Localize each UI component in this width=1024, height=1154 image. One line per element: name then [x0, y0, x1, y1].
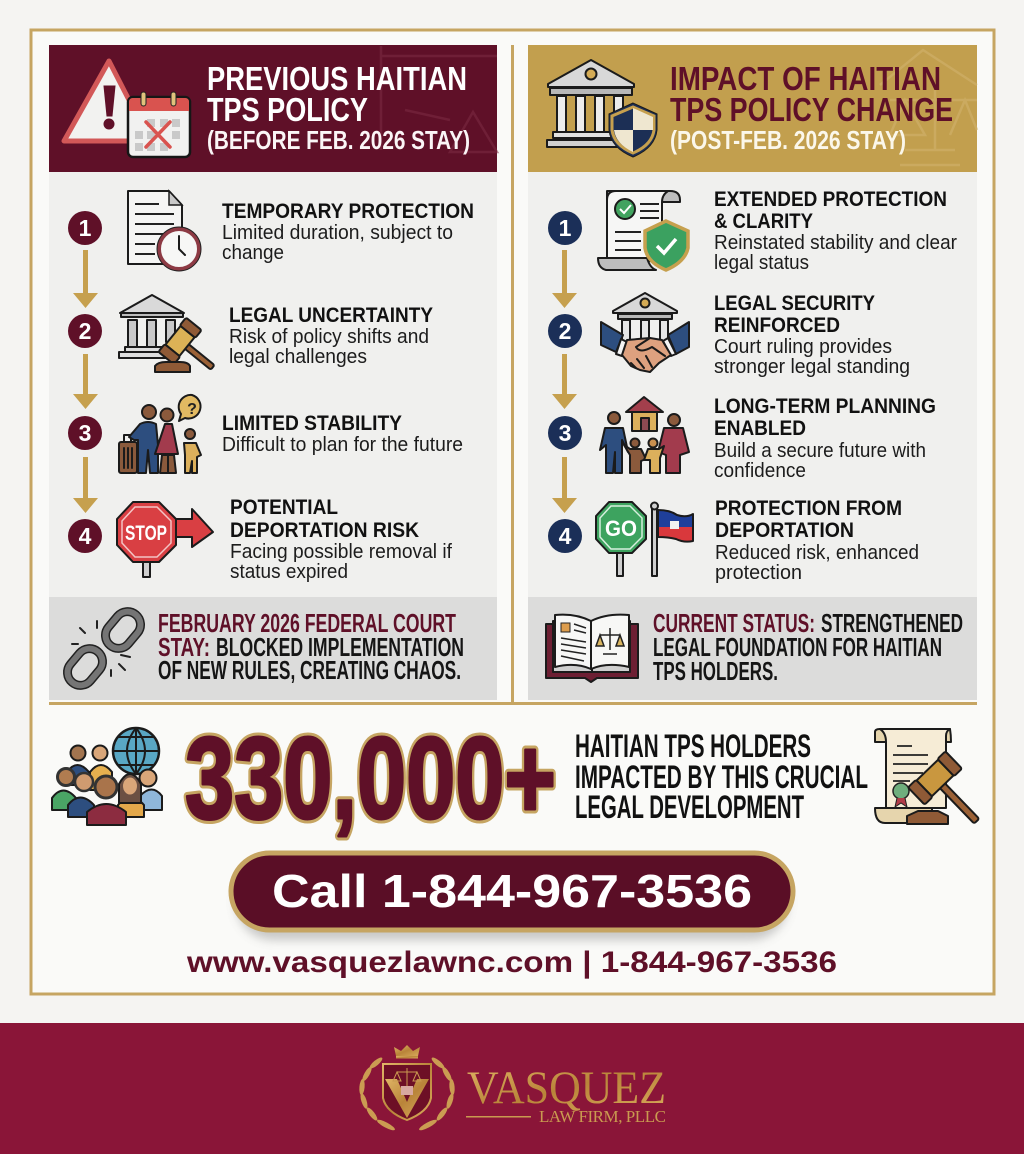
- panel: previous policy: [49, 45, 497, 700]
- statistic caption: IMPACTED BY THIS CRUCIAL: [575, 759, 868, 795]
- panel heading text: TPS POLICY: [207, 91, 368, 128]
- step 1 text: temporary protection: [222, 199, 474, 264]
- callout: federal court stay: [49, 597, 497, 700]
- panel heading text: PREVIOUS HAITIAN: [207, 60, 467, 97]
- step 2 text: legal security: stronger legal standing: [714, 356, 910, 378]
- panel heading text: (POST-FEB. 2026 STAY): [670, 125, 906, 155]
- step 4 text: protection from deportation: [715, 496, 919, 584]
- callout text: OF NEW RULES, CREATING CHAOS.: [158, 655, 461, 685]
- statistic caption: [575, 728, 868, 825]
- icon: document with clock: [128, 191, 201, 271]
- step 4 text: potential deportation risk: DEPORTATION RISK: [230, 518, 419, 542]
- step 1 text: temporary protection: TEMPORARY PROTECTION: [222, 199, 474, 223]
- callout text: TPS HOLDERS.: [653, 656, 778, 686]
- icon: family with suitcase: ?: [187, 401, 197, 418]
- icon: go sign with Haitian flag: GO: [605, 516, 637, 541]
- logo: vasquez law firm: [359, 1045, 666, 1132]
- panel heading text: TPS POLICY CHANGE: [670, 91, 953, 128]
- statistic caption: HAITIAN TPS HOLDERS: [575, 728, 811, 764]
- step 3 text: long-term planning: ENABLED: [714, 416, 806, 440]
- callout text: [653, 608, 963, 686]
- icon: broken chain: [62, 606, 146, 691]
- callout text: [158, 608, 464, 685]
- divider: horizontal gold: [49, 702, 977, 705]
- icon: warning triangle and calendar: [64, 61, 190, 157]
- step flow numbers and arrows: right: [548, 211, 582, 553]
- step 4 text: protection from deportation: protection: [715, 562, 802, 584]
- icon: stop sign with arrow: STOP: [125, 522, 167, 545]
- step 1 text: extended protection: EXTENDED PROTECTION: [714, 187, 947, 211]
- step 1 text: extended protection: & CLARITY: [714, 209, 813, 233]
- website and phone: www.vasquezlawnc.com | 1-844-967-3536: [186, 946, 837, 979]
- icon: stop sign with arrow: [117, 502, 213, 577]
- panel heading text: [207, 60, 470, 155]
- icon: group of people with globe: [52, 728, 162, 825]
- step 3 text: limited stability: Difficult to plan for the future: [222, 434, 463, 456]
- callout text: STAY:: [158, 632, 210, 662]
- step 2 text: legal uncertainty: legal challenges: [229, 346, 367, 368]
- big number: 330,000+: 330,000+: [185, 713, 556, 843]
- icon: family with suitcase: [119, 395, 201, 473]
- step 3 text: long-term planning: Build a secure future with: [714, 440, 926, 462]
- statistic band: [52, 713, 995, 843]
- step 2 text: legal security: REINFORCED: [714, 313, 840, 337]
- step flow numbers and arrows: left: 4: [79, 523, 92, 549]
- step 3 text: limited stability: [222, 411, 463, 456]
- step 4 text: protection from deportation: Reduced risk, enhanced: [715, 542, 919, 564]
- panel heading text: IMPACT OF HAITIAN: [670, 60, 941, 97]
- step flow numbers and arrows: right: 4: [559, 523, 572, 549]
- callout text: BLOCKED IMPLEMENTATION: [216, 632, 464, 662]
- step flow numbers and arrows: left: 2: [79, 318, 91, 344]
- step 1 text: temporary protection: Limited duration, subject to: [222, 222, 453, 244]
- step 2 text: legal uncertainty: LEGAL UNCERTAINTY: [229, 303, 433, 327]
- icon: go sign with Haitian flag: [596, 502, 693, 576]
- step 1 text: extended protection: Reinstated stability and clear: [714, 232, 957, 254]
- step flow numbers and arrows: left: [68, 211, 102, 553]
- step 4 text: potential deportation risk: Facing possible removal if: [230, 541, 452, 563]
- step 3 text: long-term planning: LONG-TERM PLANNING: [714, 394, 936, 418]
- panel header: previous policy: [49, 45, 497, 172]
- icon: scroll document with shield: [598, 191, 688, 270]
- icon: courthouse with gavel: [119, 295, 226, 385]
- main gold frame: [31, 30, 994, 994]
- panel header: impact: [528, 45, 977, 172]
- big number: 330,000+: 330,000+: [185, 713, 556, 843]
- step 2 text: legal security: [714, 291, 910, 378]
- step 1 text: extended protection: legal status: [714, 252, 809, 274]
- step 2 text: legal security: Court ruling provides: [714, 336, 892, 358]
- callout text: CURRENT STATUS:: [653, 608, 815, 638]
- step 2 text: legal uncertainty: Risk of policy shifts and: [229, 326, 429, 348]
- step 1 text: extended protection: [714, 187, 957, 274]
- panel: impact of policy change: [528, 45, 977, 700]
- step flow numbers and arrows: right: 3: [559, 420, 571, 446]
- icon: scroll with gavel: [875, 729, 995, 839]
- icon: open law book: [546, 615, 638, 682]
- step flow numbers and arrows: right: 2: [559, 318, 571, 344]
- divider: vertical gold: [511, 45, 514, 703]
- call to action button: Call 1-844-967-3536: [272, 865, 752, 917]
- footer band: [0, 1023, 1024, 1154]
- step 4 text: protection from deportation: PROTECTION FROM: [715, 496, 902, 520]
- call to action button: [231, 853, 793, 940]
- logo wordmark: LAW FIRM, PLLC: [539, 1107, 666, 1126]
- step flow numbers and arrows: right: 1: [559, 215, 572, 241]
- step 2 text: legal security: LEGAL SECURITY: [714, 291, 875, 315]
- step 3 text: long-term planning: confidence: [714, 460, 806, 482]
- step 2 text: legal uncertainty: [229, 303, 433, 368]
- logo wordmark: VASQUEZ: [467, 1062, 666, 1114]
- step 3 text: long-term planning: [714, 394, 936, 482]
- callout: current status: [528, 597, 977, 700]
- step 4 text: potential deportation risk: status expired: [230, 561, 348, 583]
- callout text: FEBRUARY 2026 FEDERAL COURT: [158, 608, 456, 638]
- step 3 text: limited stability: LIMITED STABILITY: [222, 411, 402, 435]
- step 4 text: potential deportation risk: POTENTIAL: [230, 495, 338, 519]
- logo crest: [359, 1045, 455, 1132]
- statistic caption: LEGAL DEVELOPMENT: [575, 789, 804, 825]
- step flow numbers and arrows: left: 3: [79, 420, 91, 446]
- panel heading text: [670, 60, 953, 155]
- icon: family with house: [600, 397, 689, 473]
- step flow numbers and arrows: left: 1: [79, 215, 92, 241]
- step 4 text: protection from deportation: DEPORTATION: [715, 518, 854, 542]
- icon: courthouse with shield: [547, 60, 657, 157]
- icon: courthouse with handshake: [601, 293, 689, 372]
- panel heading text: (BEFORE FEB. 2026 STAY): [207, 125, 470, 155]
- step 1 text: temporary protection: change: [222, 242, 284, 264]
- step 4 text: potential deportation risk: [230, 495, 452, 583]
